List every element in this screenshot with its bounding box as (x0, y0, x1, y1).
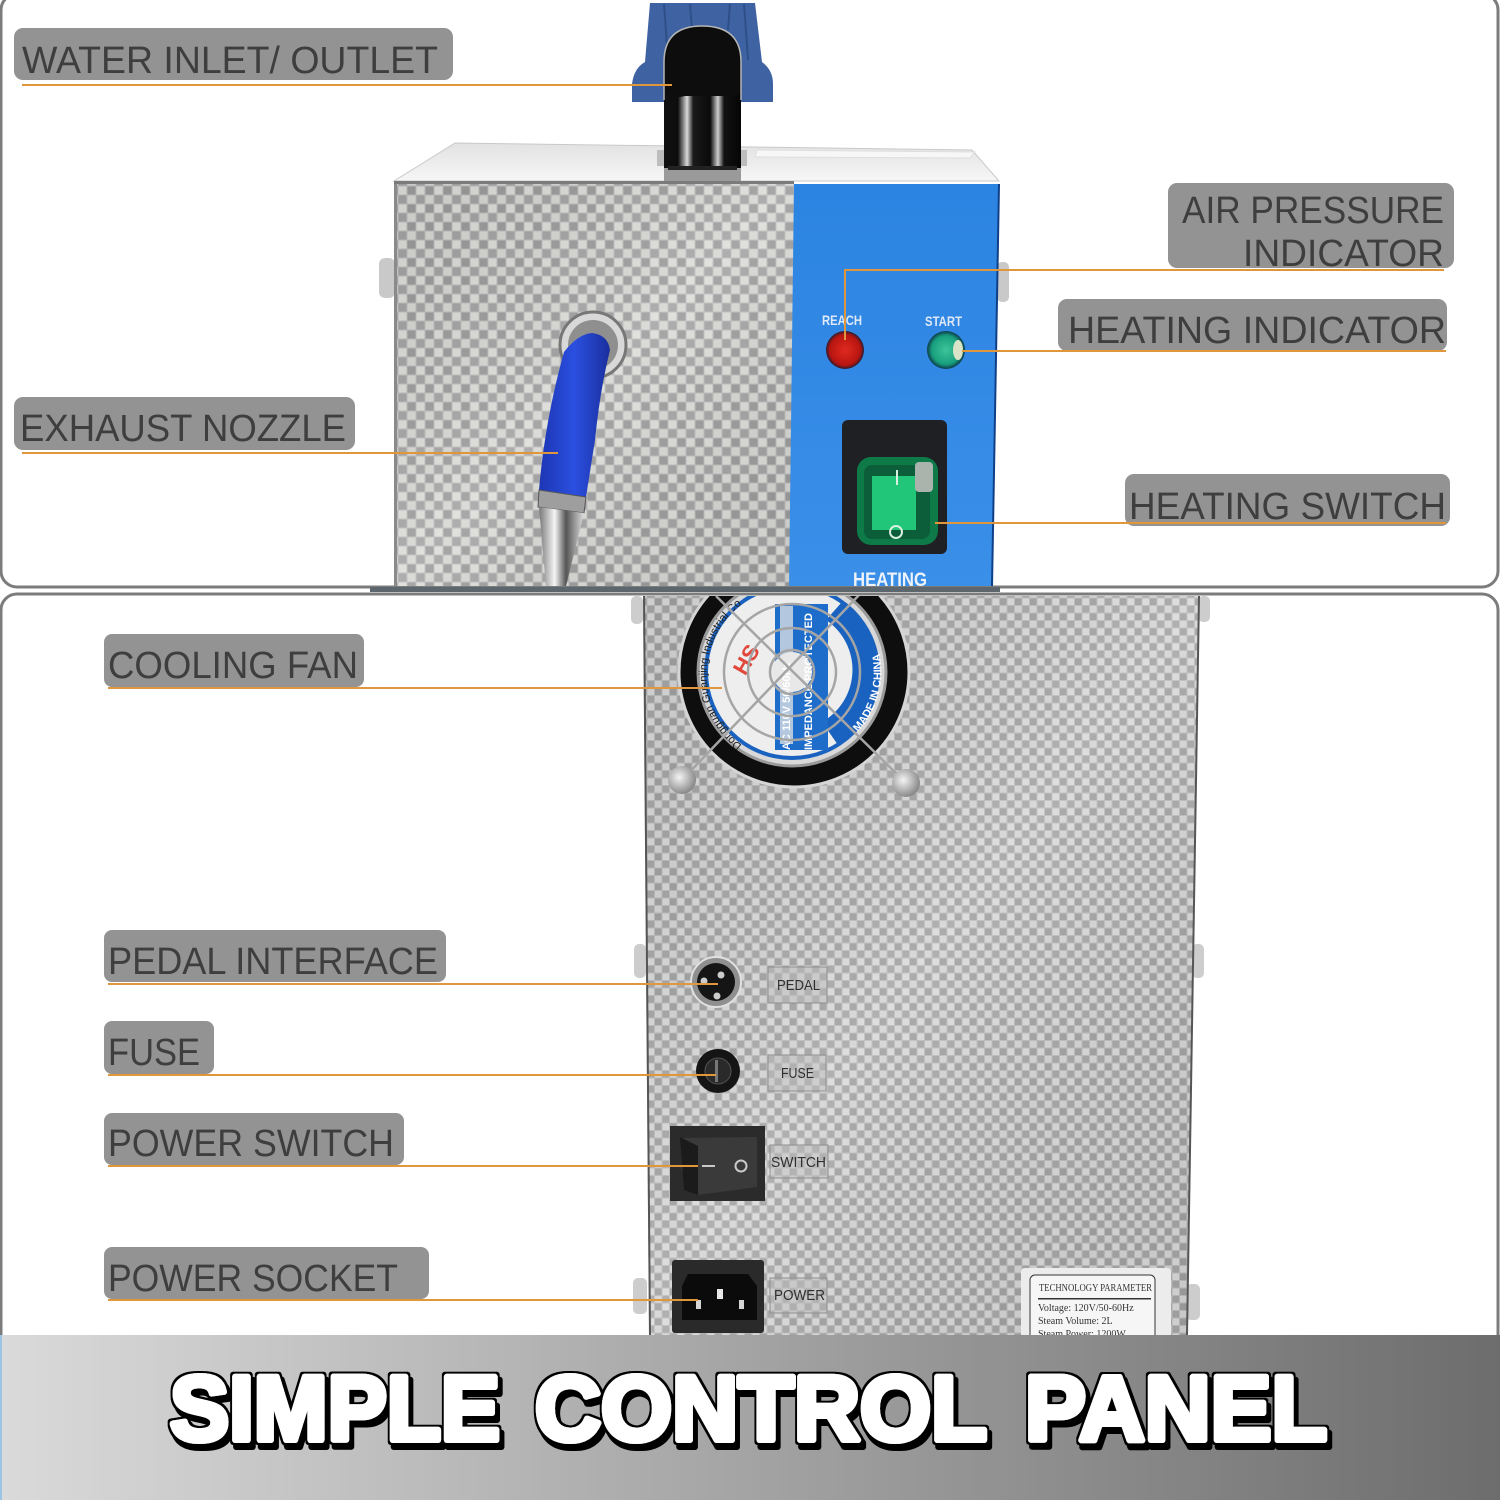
callout: heating switch: HEATING SWITCH (1129, 486, 1446, 528)
title: CONTROL (535, 1358, 987, 1460)
panel label HEATING: HEATING (853, 570, 927, 591)
FUSE tag (768, 1055, 826, 1091)
callout: cooling fan: COOLING FAN (108, 645, 358, 687)
side bolts (631, 596, 1210, 1320)
title: PANEL (1025, 1358, 1327, 1460)
power socket (672, 1260, 764, 1333)
callout: air pressure indicator: INDICATOR (1243, 233, 1444, 275)
SWITCH tag: SWITCH (771, 1154, 826, 1171)
PEDAL tag: PEDAL (777, 977, 820, 994)
callout: water inlet / outlet: WATER INLET/ OUTLET (22, 40, 438, 82)
callout: fuse (104, 1021, 716, 1075)
PEDAL tag (768, 967, 827, 1003)
panel label START: START (925, 313, 962, 329)
callout: exhaust nozzle: EXHAUST NOZZLE (20, 408, 346, 450)
fan maker name: Dongguan Guanjing Industrial Co.,Ltd (698, 600, 742, 750)
pedal connector (691, 957, 741, 1007)
SWITCH tag (770, 1145, 828, 1178)
fuse holder (696, 1049, 740, 1093)
callout: heating indicator (962, 299, 1447, 352)
title (170, 1358, 1327, 1460)
machine top face (394, 143, 999, 181)
callout: pedal interface: PEDAL INTERFACE (108, 941, 438, 983)
panel: back view of the machine (0, 592, 1500, 1335)
callout: air pressure indicator (845, 183, 1454, 340)
dark seam below the photo (370, 587, 1000, 592)
callout: heating switch (935, 474, 1450, 528)
callout: power socket (104, 1247, 698, 1300)
fan model text: AC 110V 50/60Hz (781, 661, 793, 750)
icon: blue water inlet knob (632, 3, 773, 102)
callout: air pressure indicator: AIR PRESSURE (1182, 190, 1444, 232)
icon: cooling fan (668, 596, 920, 797)
panel: front view of the machine (1, 0, 1498, 592)
callout: power switch (104, 1113, 698, 1166)
callout: heating indicator: HEATING INDICATOR (1068, 310, 1446, 352)
exhaust nozzle (538, 312, 626, 586)
side bolts (379, 258, 1009, 302)
power rocker switch (670, 1126, 765, 1201)
technology parameter plate: Steam Volume: 2L (1038, 1316, 1113, 1327)
callout: power switch: POWER SWITCH (108, 1123, 394, 1165)
machine front checker panel (394, 181, 794, 587)
air pressure red lamp (826, 331, 864, 369)
heating green lamp (927, 331, 965, 369)
banner background (0, 1335, 1500, 1500)
fan model text (782, 614, 812, 750)
POWER tag (770, 1278, 827, 1313)
callout: power socket: POWER SOCKET (108, 1258, 398, 1300)
title: SIMPLE (170, 1358, 500, 1460)
checker back plate (643, 596, 1199, 1335)
icon: black water pipe (664, 26, 741, 181)
technology parameter plate: Voltage: 120V/50-60Hz (1038, 1303, 1134, 1314)
blue control panel (789, 184, 999, 591)
callout: cooling fan (104, 634, 722, 688)
POWER tag: POWER (774, 1287, 825, 1304)
fan red logo: HS (728, 640, 765, 679)
callout: fuse: FUSE (108, 1032, 200, 1074)
panel label REACH: REACH (822, 312, 862, 328)
fan origin text: MADE IN CHINA (852, 654, 882, 732)
callout: water inlet / outlet (14, 28, 672, 85)
callout: exhaust nozzle (14, 397, 558, 453)
technology parameter plate (1021, 1268, 1171, 1335)
technology parameter plate: TECHNOLOGY PARAMETER (1039, 1283, 1152, 1294)
FUSE tag: FUSE (781, 1065, 814, 1082)
callout: pedal interface (104, 930, 718, 984)
technology parameter plate: Steam Power: 1200W (1038, 1329, 1126, 1340)
fan guard wires (691, 596, 897, 774)
fan model text: IMPEDANCE PROTECTED (803, 613, 815, 750)
heating rocker switch (842, 420, 947, 554)
